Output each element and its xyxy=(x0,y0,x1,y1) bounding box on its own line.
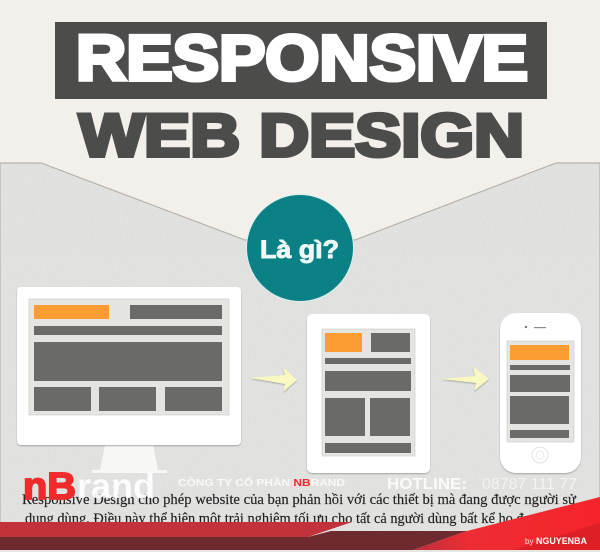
body text xyxy=(22,492,577,527)
footer credit: by NGUYENBA: NGUYENBA xyxy=(536,536,587,546)
arrow: tablet to phone xyxy=(441,366,489,391)
body text: Responsive Design cho phép website của bạn phản hồi với các thiết bị mà đang được người sử xyxy=(22,492,577,508)
watermark logo: nBrand: rand xyxy=(77,467,155,506)
title: WEB DESIGN: WEB DESIGN xyxy=(79,102,524,169)
icon: smartphone xyxy=(500,313,581,473)
circle badge: Là gì? xyxy=(246,194,354,302)
icon: desktop monitor xyxy=(17,287,241,473)
watermark: hotline: HOTLINE: xyxy=(387,476,467,493)
footer ribbon xyxy=(0,497,600,552)
body text: dụng dùng. Điều này thể hiện một trải nghiệm tối ưu cho tất cả người dùng bất kể họ đa xyxy=(25,511,531,527)
watermark logo: nBrand: nB xyxy=(23,466,76,508)
footer credit: by NGUYENBA: by xyxy=(525,537,533,546)
circle badge: Là gì?: Là gì? xyxy=(260,236,339,264)
title: RESPONSIVE banner: RESPONSIVE xyxy=(76,22,528,94)
watermark logo: nBrand xyxy=(23,466,155,508)
icon: tablet xyxy=(307,314,430,473)
arrow: desktop to tablet xyxy=(250,367,297,392)
watermark: hotline xyxy=(387,476,577,493)
watermark: company name: CÔNG TY CỔ PHẦN NBRAND xyxy=(178,476,345,489)
watermark: hotline: 08787 111 77 xyxy=(482,476,577,493)
background: lower grey envelope panel xyxy=(0,163,600,552)
